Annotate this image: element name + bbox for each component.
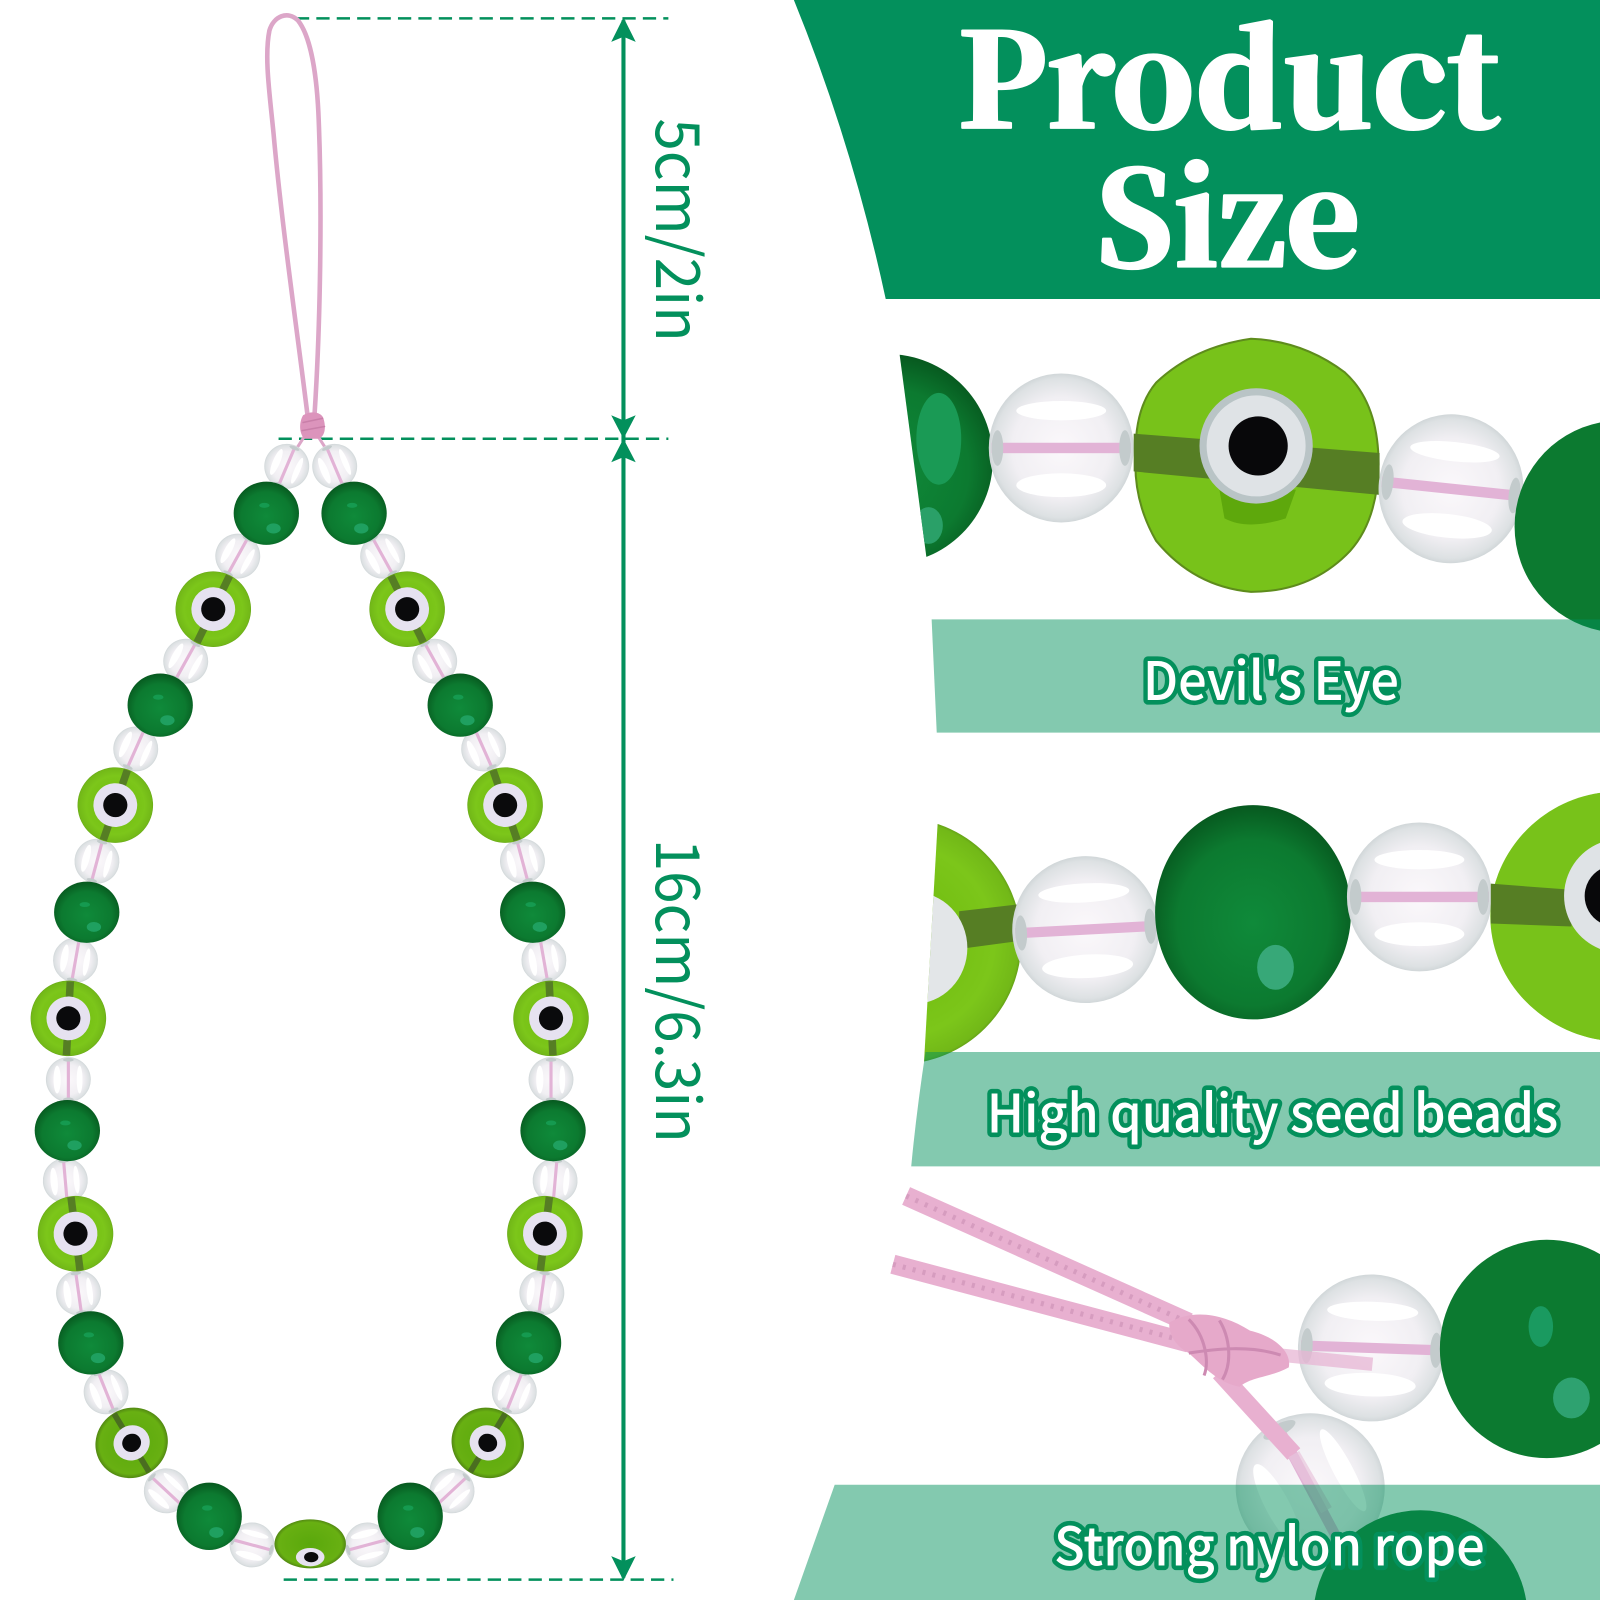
photo: seed beads closeup <box>924 792 1600 1062</box>
photo: nylon rope closeup <box>893 1196 1600 1600</box>
dimension lines and arrows <box>279 17 673 1581</box>
strap loop and knot <box>267 15 333 459</box>
label bar: Strong nylon rope: Strong nylon rope <box>1054 1504 1485 1581</box>
label bar: High quality seed beads: High quality seed beads <box>987 1072 1558 1149</box>
necklace: dark green beads <box>35 482 586 1550</box>
label bar: Devil's Eye: Devil's Eye <box>1143 639 1399 716</box>
photo: devil's eye closeup <box>900 338 1600 631</box>
dimension label: 5cm/2in: 5cm/2in <box>638 118 727 342</box>
label bar: Strong nylon rope <box>794 1485 1600 1600</box>
dimension label: 16cm/6.3in: 16cm/6.3in <box>638 839 727 1143</box>
label bar: Devil's Eye <box>932 619 1600 733</box>
label bar: High quality seed beads <box>911 1052 1600 1166</box>
panel: title banner <box>794 0 1600 304</box>
title: Size: Size <box>1096 118 1360 304</box>
necklace: evil eye beads <box>29 559 591 1568</box>
necklace: clear beads <box>41 437 579 1572</box>
